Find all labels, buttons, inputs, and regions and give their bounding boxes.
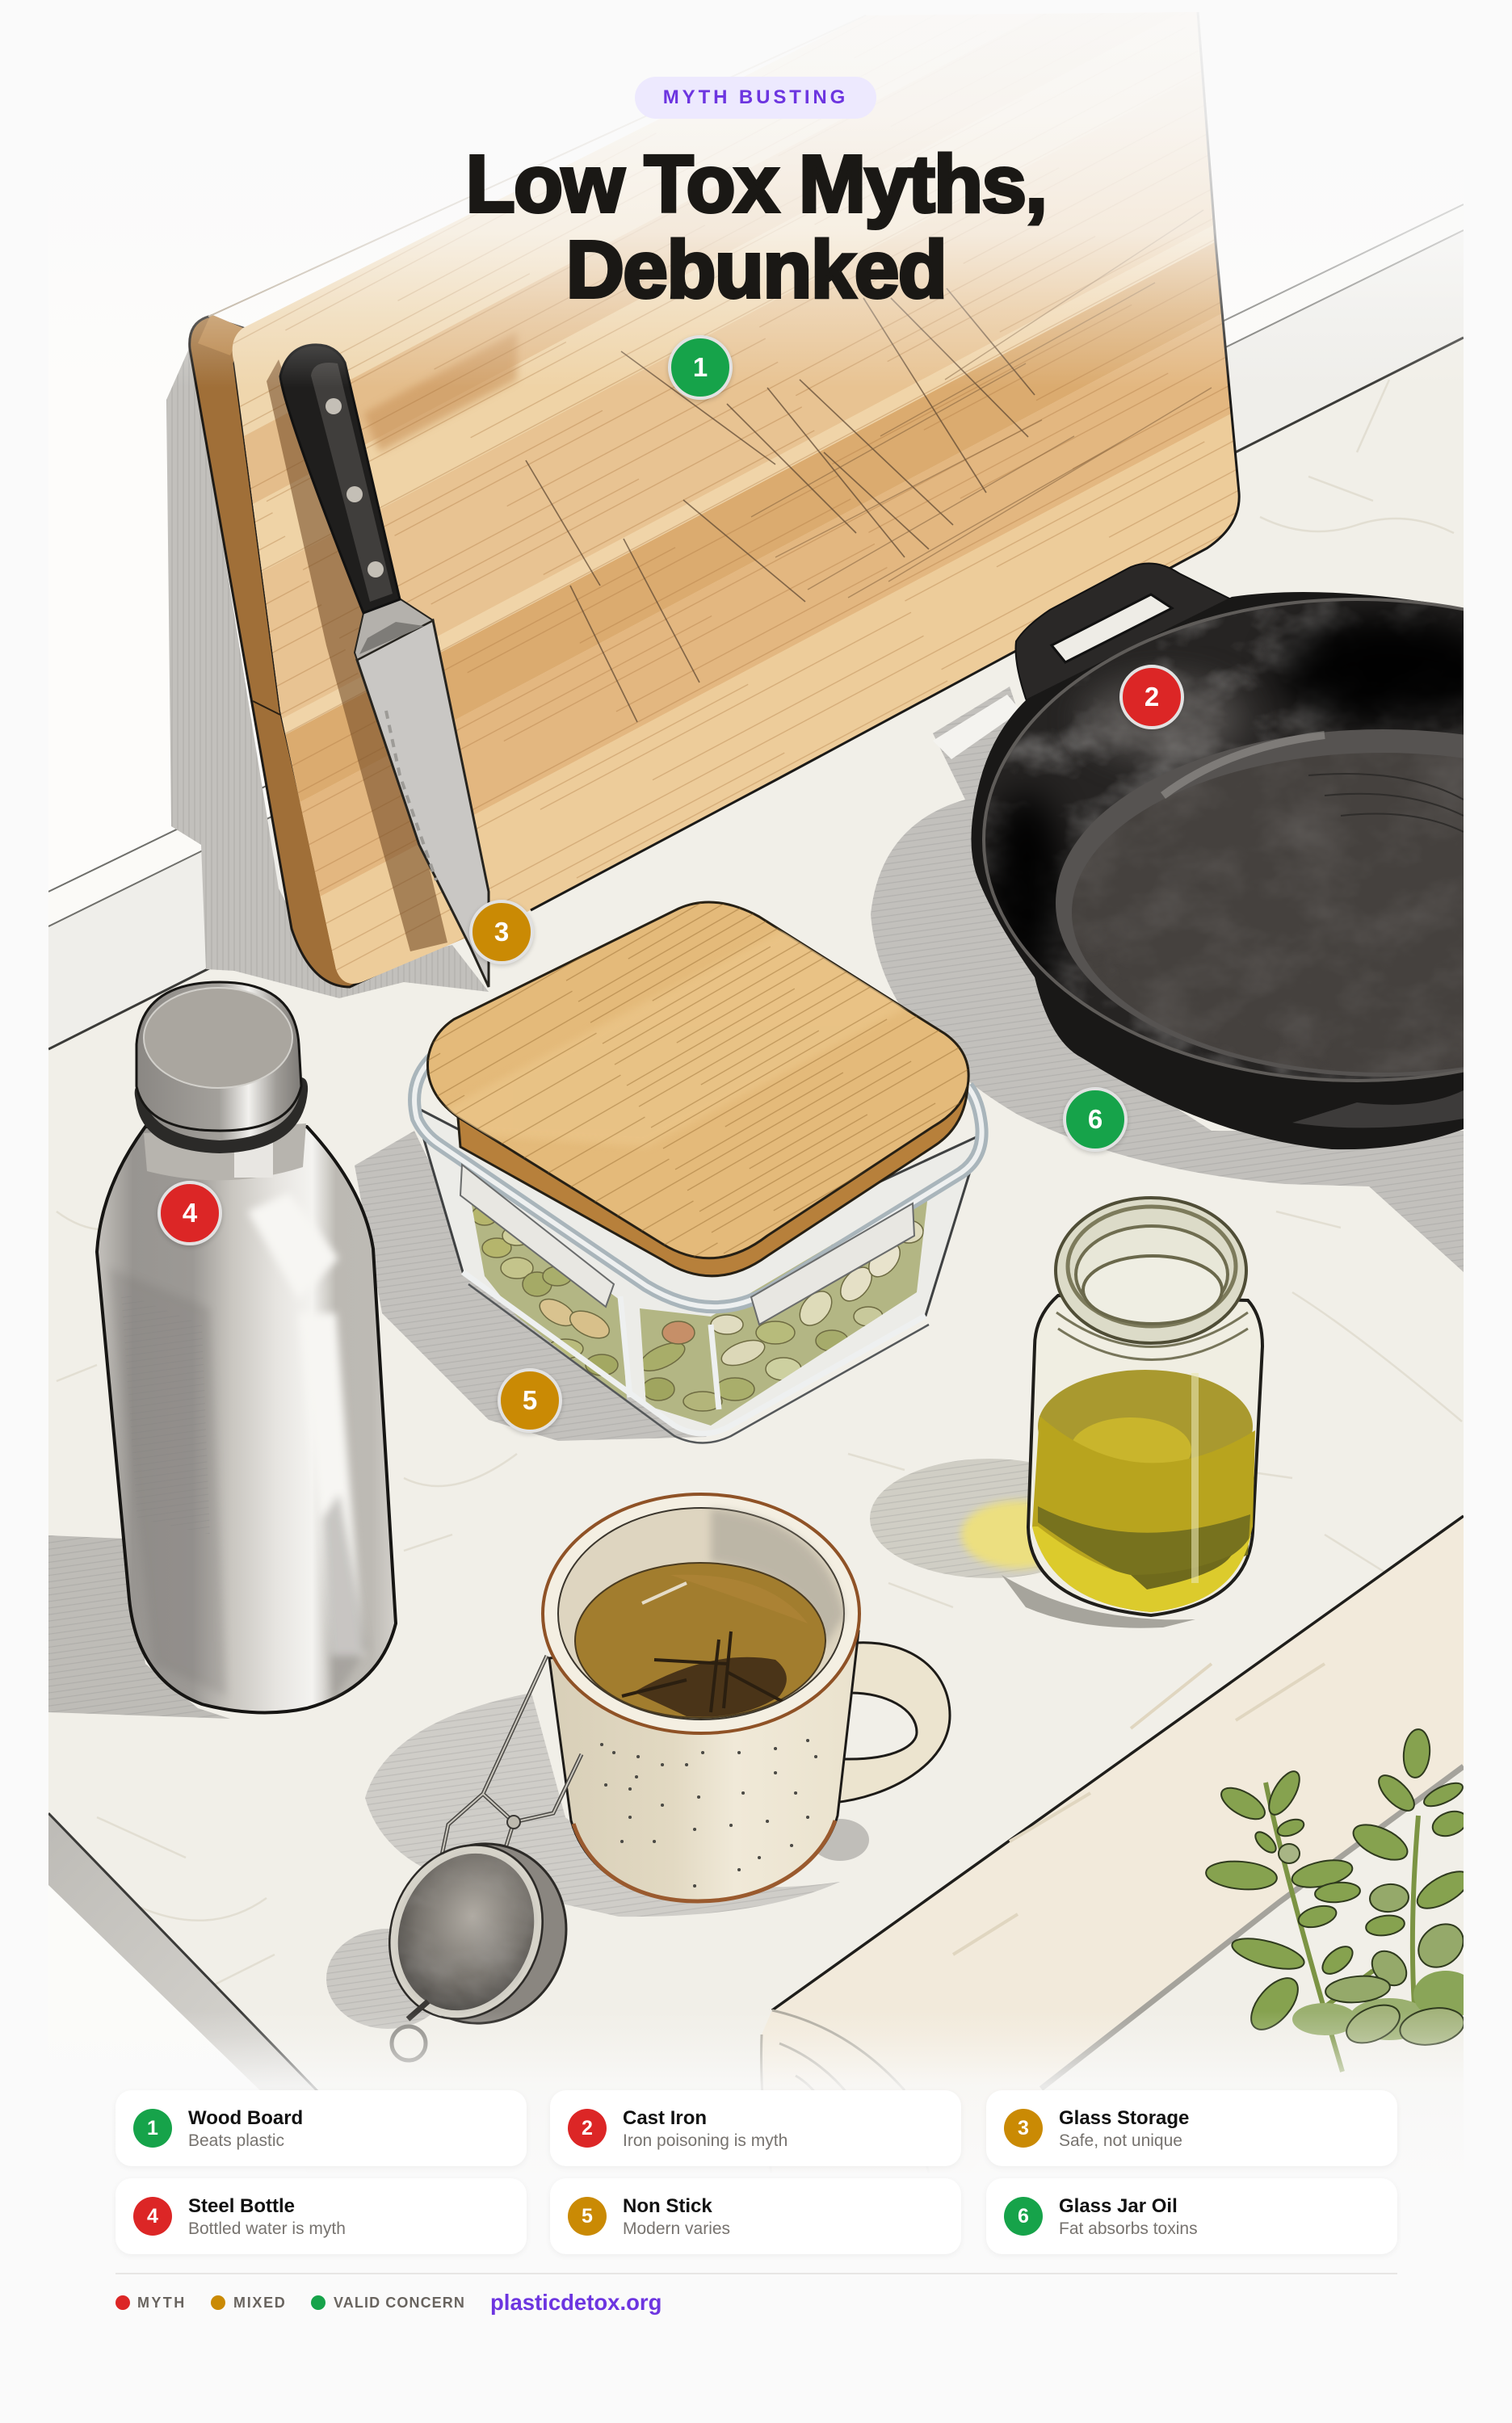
tea leaves — [634, 1657, 787, 1717]
card: wood board: 1 — [147, 2117, 158, 2140]
tea mug — [543, 1494, 950, 1901]
title: Low Tox Myths, — [466, 139, 1046, 229]
marker 4 — [158, 1181, 222, 1245]
tea — [575, 1563, 825, 1718]
bottle body — [97, 1127, 396, 1712]
shadow: bottle — [48, 1535, 230, 1719]
card: glass jar oil: Fat absorbs toxins — [1059, 2219, 1198, 2238]
legend: MIXED — [233, 2295, 287, 2311]
mug handle — [824, 1643, 950, 1803]
card: non stick: Modern varies — [623, 2219, 730, 2238]
card: glass storage — [986, 2090, 1397, 2166]
shadow: jar — [870, 1459, 1195, 1628]
bottom fade overlay — [0, 2011, 1512, 2177]
counter front edge — [48, 1812, 318, 2090]
pan inner wall — [984, 599, 1512, 1081]
glass jar of oil — [1028, 1198, 1262, 1615]
marble counter top — [48, 338, 1464, 2173]
card: wood board: Beats plastic — [188, 2131, 284, 2150]
bolster — [355, 599, 433, 660]
card: glass storage: Safe, not unique — [1059, 2131, 1182, 2150]
board side edge — [190, 317, 388, 987]
card: steel bottle: 4 — [147, 2205, 158, 2228]
loop handle — [408, 2001, 428, 2019]
steel bottle — [97, 982, 396, 1712]
marker 3 — [469, 900, 534, 964]
title: Debunked — [566, 225, 946, 315]
herb sprigs — [1205, 1728, 1478, 2072]
badge: myth busting — [635, 77, 876, 119]
card: cast iron: 2 — [582, 2117, 593, 2140]
bottle cap — [136, 982, 301, 1131]
pan handle — [1016, 564, 1236, 751]
card: glass storage: 3 — [1018, 2117, 1029, 2140]
marker 2: 2 — [1144, 682, 1159, 712]
card: steel bottle: Bottled water is myth — [188, 2219, 346, 2238]
card: wood board: Wood Board — [188, 2107, 303, 2129]
card: non stick: 5 — [582, 2205, 593, 2228]
glass food container — [404, 808, 1010, 1442]
title — [466, 139, 1046, 315]
card: glass storage: Glass Storage — [1059, 2107, 1189, 2129]
latches — [460, 1165, 614, 1307]
website link: plasticdetox.org — [490, 2290, 662, 2315]
shadow: container — [355, 1131, 707, 1441]
jar rim and threads — [1056, 1198, 1246, 1343]
card: glass jar oil: Glass Jar Oil — [1059, 2195, 1178, 2217]
marker 4: 4 — [183, 1198, 197, 1228]
mug rim — [543, 1494, 859, 1733]
marker 5: 5 — [523, 1385, 537, 1415]
glass body — [414, 1107, 981, 1434]
jar body — [1028, 1295, 1262, 1615]
card: cast iron — [550, 2090, 961, 2166]
knife shadow — [267, 359, 447, 951]
seeds — [452, 1179, 937, 1438]
wires — [442, 1656, 582, 1855]
shadow: pan — [871, 687, 1464, 1272]
mug body — [549, 1631, 859, 1901]
marker 2 — [1119, 665, 1184, 729]
speckles — [602, 1741, 816, 1886]
legend: VALID CONCERN — [334, 2295, 465, 2311]
glass rim — [414, 1058, 982, 1307]
parchment paper roll — [761, 1516, 1464, 2173]
blade — [357, 620, 489, 987]
bamboo lid — [452, 1050, 968, 1276]
bottle neck — [144, 1123, 306, 1180]
marker 6 — [1063, 1087, 1128, 1152]
ball — [372, 1820, 591, 2047]
scratches — [526, 288, 1035, 722]
backsplash ledge — [48, 204, 1464, 1049]
cast iron pan — [971, 564, 1512, 1149]
card: cast iron: Iron poisoning is myth — [623, 2131, 788, 2150]
card: wood board — [116, 2090, 527, 2166]
card: steel bottle — [116, 2178, 527, 2254]
marker 1: 1 — [693, 352, 708, 382]
oil — [1038, 1370, 1253, 1483]
shadow: board on wall — [166, 330, 489, 998]
dark ring — [135, 1077, 308, 1153]
card: non stick — [550, 2178, 961, 2254]
board face — [233, 41, 1238, 984]
card: cast iron: Cast Iron — [623, 2107, 707, 2129]
cutting board — [188, 12, 1241, 989]
shadow: mug and strainer — [326, 1693, 869, 2029]
pan floor — [1056, 729, 1512, 1077]
legend: MYTH — [137, 2295, 187, 2311]
knife — [280, 345, 489, 987]
card: glass jar oil: 6 — [1018, 2205, 1029, 2228]
marker 5 — [498, 1368, 562, 1433]
card: non stick: Non Stick — [623, 2195, 712, 2217]
marker 6: 6 — [1088, 1104, 1102, 1134]
card: steel bottle: Steel Bottle — [188, 2195, 295, 2217]
legend — [116, 2295, 465, 2311]
tea strainer — [363, 1656, 591, 2060]
badge: myth busting: MYTH BUSTING — [663, 86, 848, 108]
marker 1 — [668, 335, 733, 400]
handle — [280, 345, 400, 613]
card: glass jar oil — [986, 2178, 1397, 2254]
top fade overlay — [0, 0, 1512, 388]
marker 3: 3 — [494, 917, 509, 947]
pan outer body — [971, 592, 1464, 1149]
